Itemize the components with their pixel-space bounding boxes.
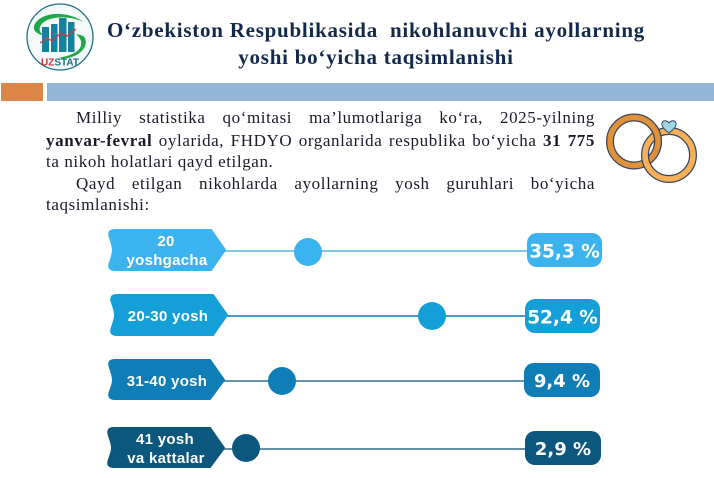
intro text: yanvar-fevral oylarida, FHDYO organlarida respublika bo‘yicha 31 775 (46, 131, 595, 150)
row: 41 yosh va kattalar (108, 428, 601, 467)
title (107, 18, 645, 69)
title: yoshi bo‘yicha taqsimlanishi (238, 45, 514, 69)
row: 20 yoshgacha: 20 (157, 233, 175, 250)
row: 20-30 yosh: 52,4 % (527, 308, 598, 328)
intro text: Milliy statistika qo‘mitasi ma’lumotlariga ko‘ra, 2025-yilning (76, 108, 595, 127)
title: O‘zbekiston Respublikasida nikohlanuvchi ayollarning (107, 18, 645, 42)
row: 20-30 yosh (111, 295, 600, 335)
row: 31-40 yosh: 31-40 yosh (127, 373, 207, 390)
intro text: taqsimlanishi: (46, 195, 150, 214)
row: 41 yosh va kattalar: va kattalar (127, 450, 205, 467)
row: 20 yoshgacha: 35,3 % (529, 242, 600, 262)
intro text (46, 108, 595, 214)
row: 41 yosh va kattalar: 41 yosh (136, 431, 194, 448)
header band: orange block (1, 83, 43, 101)
header band: blue bar (47, 83, 714, 101)
row: 31-40 yosh (109, 360, 600, 399)
row: 20-30 yosh: 20-30 yosh (128, 308, 208, 325)
row: 20 yoshgacha: yoshgacha (126, 252, 208, 269)
row: 20 yoshgacha (109, 230, 602, 270)
logo: UZSTAT: UZSTAT (41, 58, 79, 68)
intro text: ta nikoh holatlari qayd etilgan. (46, 152, 273, 171)
row: 31-40 yosh: 9,4 % (534, 371, 590, 392)
intro text: Qayd etilgan nikohlarda ayollarning yosh guruhlari bo‘yicha (76, 174, 595, 193)
row: 41 yosh va kattalar: 2,9 % (535, 439, 591, 460)
